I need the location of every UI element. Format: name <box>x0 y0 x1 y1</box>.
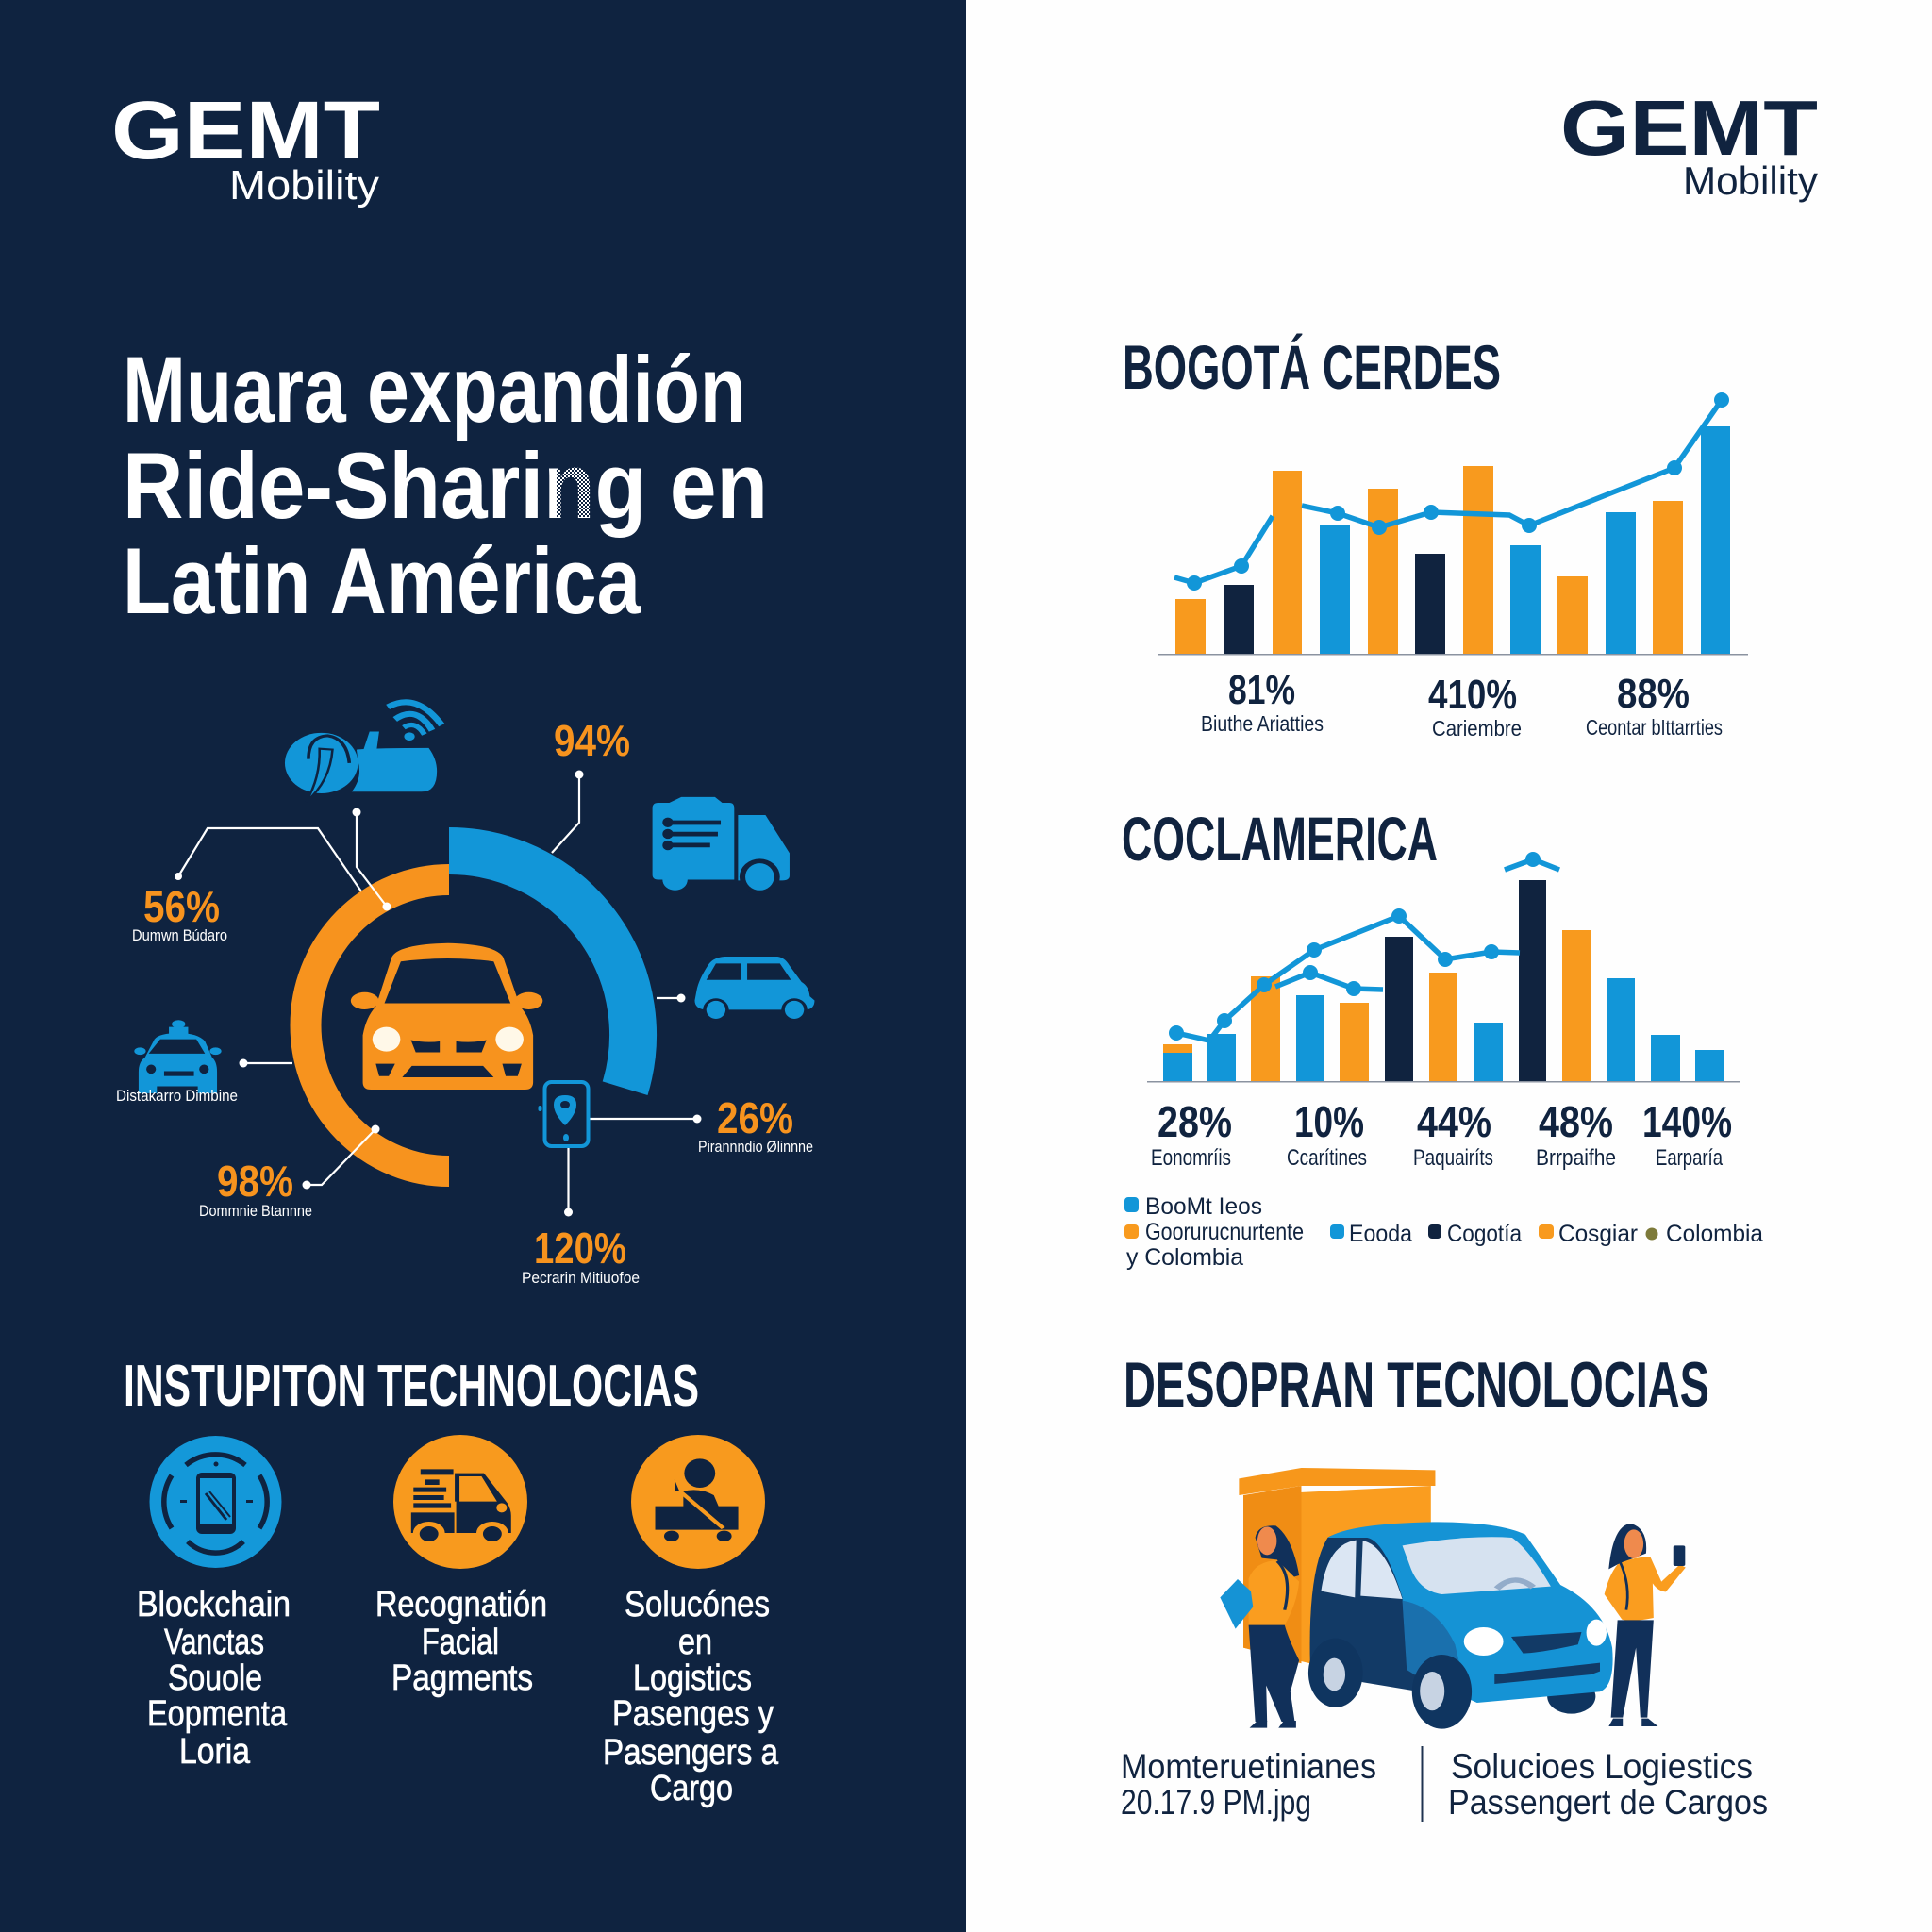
stat: 98% <box>199 1157 312 1220</box>
caption: right: Solucioes Logiestics <box>1451 1747 1753 1786</box>
stat: 81%: 81% <box>1228 667 1295 713</box>
label: logistics: Logistics <box>633 1658 752 1698</box>
legend: Cogotía <box>1447 1221 1522 1247</box>
heading: Bogotá: BOGOTÁ CERDES <box>1123 332 1501 402</box>
stat: 120% <box>522 1224 640 1287</box>
stat: 120%: 120% <box>534 1224 626 1273</box>
legend: Colombia <box>1666 1221 1763 1247</box>
stat: 410%: Cariembre <box>1432 716 1522 741</box>
heading: Coclamerica: COCLAMERICA <box>1122 804 1438 874</box>
stat: 26% <box>698 1093 813 1156</box>
caption: right <box>1448 1747 1768 1822</box>
icon: taxi <box>134 1020 222 1093</box>
trend lines <box>1169 852 1559 1041</box>
label: blockchain: Souole <box>168 1658 262 1698</box>
woman with phone <box>1605 1524 1686 1726</box>
icon: phone with pin <box>538 1082 589 1146</box>
label: logistics: Pasengers a <box>603 1733 779 1773</box>
stat: 120%: Pecrarin Mitiuofoe <box>522 1269 640 1287</box>
stat: taxi label: Distakarro Dimbine <box>116 1087 238 1105</box>
connector dots <box>175 770 702 1217</box>
stat: 98%: 98% <box>217 1157 293 1206</box>
logo: left GEMT Mobility <box>111 85 380 208</box>
label: logistics <box>603 1585 779 1808</box>
legend <box>1124 1193 1763 1271</box>
legend: Cosgiar <box>1558 1221 1638 1247</box>
stat row: Ccarítines <box>1287 1145 1367 1171</box>
logo: right GEMT Mobility <box>1560 84 1818 203</box>
icon: phone in blue circle <box>149 1436 281 1568</box>
stat: 56%: 56% <box>143 882 220 931</box>
title: Ride-Sharing en <box>123 433 768 538</box>
label: facial recognition: Pagments <box>391 1658 533 1698</box>
stat row: 44% <box>1417 1097 1491 1146</box>
axis <box>1158 654 1748 655</box>
caption divider <box>1421 1746 1423 1822</box>
legend: Eooda <box>1349 1221 1412 1247</box>
logo: left GEMT Mobility: GEMT <box>111 85 380 176</box>
label: logistics: en <box>678 1623 712 1662</box>
stat: 88%: Ceontar bIttarrties <box>1586 715 1723 740</box>
label: logistics: Cargo <box>650 1769 733 1808</box>
blue arc <box>449 851 633 1089</box>
logo: left GEMT Mobility: Mobility <box>229 162 379 208</box>
stat: 410% <box>1428 672 1522 741</box>
label: logistics: Pasenges y <box>612 1694 774 1734</box>
stat row: Earparía <box>1656 1145 1723 1171</box>
caption: right: Passengert de Cargos <box>1448 1783 1768 1822</box>
logo: right GEMT Mobility: GEMT <box>1560 84 1818 172</box>
legend: Goorurucnurtente <box>1145 1219 1304 1245</box>
bars <box>1163 880 1724 1082</box>
caption: left: Momteruetinianes <box>1121 1747 1376 1786</box>
label: blockchain <box>137 1585 291 1772</box>
woman with folder <box>1220 1525 1299 1728</box>
stat row: Paquairíts <box>1413 1145 1493 1171</box>
caption: left <box>1121 1747 1376 1822</box>
label: facial recognition: Facial <box>422 1623 499 1662</box>
caption: left: 20.17.9 PM.jpg <box>1121 1783 1311 1822</box>
bar chart: Coclamerica <box>1147 852 1740 1171</box>
panel: right white background <box>966 0 1932 1932</box>
stat row <box>1151 1097 1732 1171</box>
legend: y Colombia <box>1126 1244 1243 1271</box>
stat row: Eonomríis <box>1151 1145 1231 1171</box>
title: Muara expandión <box>123 337 746 441</box>
label: facial recognition <box>375 1585 547 1698</box>
car <box>1308 1522 1613 1729</box>
bars <box>1175 426 1730 655</box>
cargo box <box>1239 1468 1435 1670</box>
stat row: 48% <box>1539 1097 1613 1146</box>
heading: left technologies: INSTUPITON TECHNOLOCIAS <box>124 1354 699 1419</box>
technology: blockchain <box>137 1436 291 1772</box>
stat: 94%: 94% <box>554 716 630 765</box>
label: blockchain: Eopmenta <box>147 1694 288 1734</box>
label: blockchain: Vanctas <box>164 1623 264 1662</box>
stat: 410%: 410% <box>1428 672 1517 718</box>
icon: van in orange circle <box>393 1435 527 1569</box>
title <box>123 337 768 633</box>
icon: scooter with wifi <box>285 702 441 802</box>
icon: delivery truck <box>653 797 790 895</box>
axis <box>1147 1081 1740 1083</box>
stat row: 28% <box>1158 1097 1232 1146</box>
stat: 81%: Biuthe Ariatties <box>1201 711 1324 736</box>
stat row: 10% <box>1294 1097 1364 1146</box>
label: blockchain: Blockchain <box>137 1585 291 1624</box>
connector lines <box>178 774 697 1212</box>
icon: blue car <box>694 957 814 1022</box>
panel: left navy background <box>0 0 966 1932</box>
stat row: Brrpaifhe <box>1536 1145 1616 1171</box>
stat: 88% <box>1586 671 1723 740</box>
stat: 81% <box>1201 667 1324 736</box>
legend: BooMt Ieos <box>1145 1193 1262 1220</box>
icon: person in cart <box>631 1435 765 1569</box>
stat: 26%: 26% <box>717 1093 793 1142</box>
label: logistics: Solucónes <box>625 1585 770 1624</box>
stat: 26%: Pirannndio Ølinnne <box>698 1138 813 1156</box>
stat: 88%: 88% <box>1617 671 1690 717</box>
stat: 98%: Dommnie Btannne <box>199 1202 312 1220</box>
illustration: car, cargo box and two women <box>1220 1468 1686 1729</box>
bar chart: Bogotá <box>1158 392 1748 741</box>
stat: 56%: Dumwn Búdaro <box>132 926 227 944</box>
orange arc <box>306 879 449 1172</box>
stat: 56% <box>132 882 227 944</box>
logo: right GEMT Mobility: Mobility <box>1683 158 1818 203</box>
title: Latin América <box>123 528 641 633</box>
technology: facial recognition <box>375 1435 547 1698</box>
radial diagram <box>116 702 814 1287</box>
stat row: 140% <box>1642 1097 1732 1146</box>
label: blockchain: Loria <box>179 1732 251 1772</box>
icon: central orange car <box>351 943 542 1090</box>
technology: logistics <box>603 1435 779 1808</box>
label: facial recognition: Recognatión <box>375 1585 547 1624</box>
trend line <box>1174 392 1729 591</box>
